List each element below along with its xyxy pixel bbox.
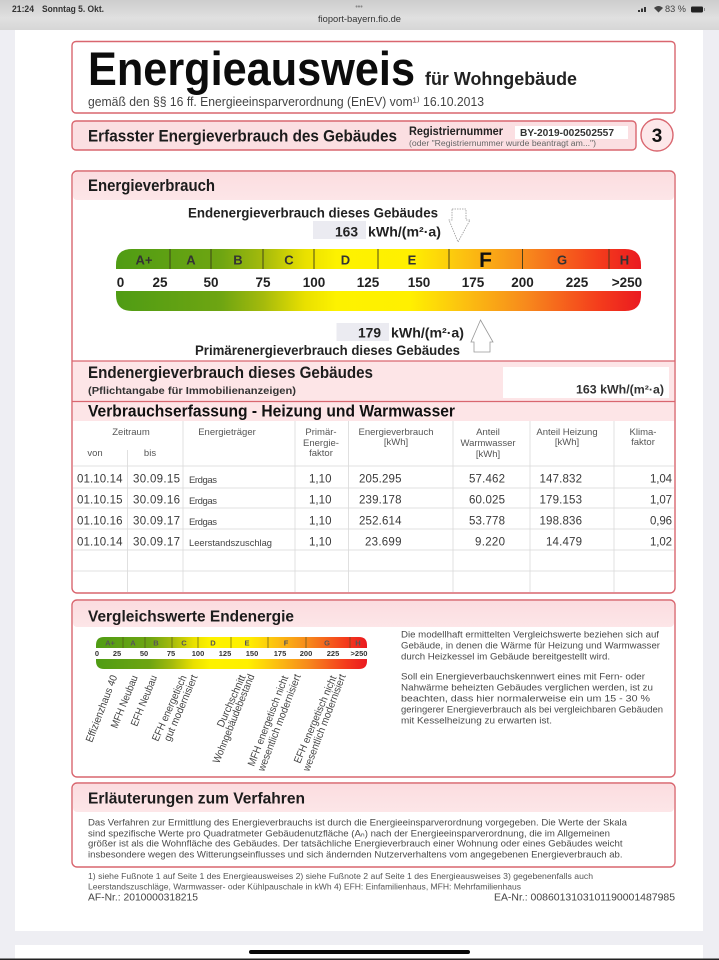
table header: faktor — [631, 437, 655, 448]
class labels: A — [186, 252, 196, 268]
table header: [kWh] — [384, 437, 408, 448]
explanatory text: Soll ein Energieverbauchskennwert eines mit Fern- oder — [401, 672, 646, 682]
explanatory text: geringerer Energieverbrauch als bei vergleichbaren Gebäuden — [401, 704, 663, 716]
status time and date: 21:24 — [12, 4, 34, 14]
header: Energieverbrauch: Energieverbrauch — [88, 177, 215, 195]
panel: comparison values — [72, 600, 675, 777]
table header: Warmwasser — [460, 438, 516, 449]
procedure text — [88, 818, 628, 860]
rotated building type labels — [84, 672, 349, 774]
mini class labels: C — [181, 638, 187, 648]
mini numbers: 25 — [113, 649, 121, 658]
registration note: (oder "Registriernummer wurde beantragt am...") — [409, 139, 596, 148]
table header: von — [87, 448, 103, 459]
header: Energieverbrauch — [73, 172, 674, 200]
table row 1 — [77, 474, 673, 486]
table header: [kWh] — [555, 437, 579, 448]
table row 2: 179.153 — [540, 494, 582, 506]
table header: Energie- — [303, 438, 339, 449]
arrow: final energy down — [449, 209, 470, 242]
mini scale — [95, 637, 367, 669]
section: mandatory final energy: Endenergieverbrauch dieses Gebäudes — [88, 364, 373, 382]
class labels: D — [341, 252, 350, 268]
explanatory text: Die modellhaft ermittelten Vergleichswerte beziehen sich auf — [401, 630, 659, 640]
page number badge: 3 — [652, 126, 662, 147]
table row 1: 205.295 — [359, 474, 402, 486]
table header: Energieverbrauch — [358, 427, 434, 438]
heading: Erfasster Energieverbrauch des Gebäudes — [88, 126, 397, 146]
table row 4 — [77, 536, 672, 549]
registration number — [515, 126, 628, 139]
class dividers — [170, 249, 609, 269]
arrow: primary energy up — [471, 320, 493, 352]
explanatory text: Gebäude, in denen die Wärme für Heizung und Warmwasser — [401, 640, 661, 652]
browser status bar — [0, 0, 719, 30]
value: final energy — [313, 221, 441, 240]
scale numbers: 125 — [357, 275, 380, 290]
rotated building type labels: MFH Neubau — [109, 674, 141, 730]
mini numbers: 225 — [327, 649, 339, 658]
class labels: C — [284, 252, 294, 268]
scale numbers: >250 — [612, 275, 642, 290]
procedure text: Das Verfahren zur Ermittlung des Energieverbrauchs ist durch die Energieeinsparverordnung vorgegeben. Die Werte der Skala — [88, 818, 628, 828]
browser tab dots: ••• — [355, 4, 363, 11]
primary energy gradient bar — [116, 291, 641, 311]
explanatory text: Nahwärme beheizten Gebäudes verglichen werden, ist zu — [401, 682, 653, 694]
table row 4: 14.479 — [546, 536, 582, 548]
table row 2: 01.10.15 — [77, 494, 122, 506]
table row 3: Erdgas — [189, 517, 217, 528]
table row 3: 1,10 — [309, 516, 332, 528]
scale numbers: 175 — [462, 275, 485, 290]
mini numbers: >250 — [351, 649, 367, 658]
footnotes: Leerstandszuschläge, Warmwasser- oder Kühlpauschale in kWh 4) EFH: Einfamilienhaus, MFH: Mehrfamilienhaus — [88, 882, 521, 892]
table row 2: 30.09.16 — [133, 494, 180, 506]
class labels: A+ — [136, 252, 153, 268]
mini numbers: 125 — [219, 649, 231, 658]
table row 2: 1,07 — [650, 494, 672, 506]
class labels: B — [233, 252, 243, 268]
table row 1: 30.09.15 — [133, 474, 180, 486]
section: mandatory final energy — [72, 361, 675, 401]
footnotes — [88, 871, 593, 892]
table row 2: 239.178 — [359, 494, 402, 506]
panel: procedure notes — [72, 783, 675, 867]
section: consumption table: Verbrauchserfassung - Heizung und Warmwasser — [88, 402, 455, 420]
bottom edge — [0, 958, 719, 960]
table header: Anteil — [476, 427, 500, 438]
table row 1: 147.832 — [540, 474, 582, 486]
footnotes: 1) siehe Fußnote 1 auf Seite 1 des Energieausweises 2) siehe Fußnote 2 auf Seite 1 des Energieausweises 3) gegebenenfalls auch — [88, 871, 593, 881]
mini numbers: 175 — [274, 649, 286, 658]
table row 4: 1,02 — [650, 536, 672, 548]
registration label: Registriernummer — [409, 126, 503, 138]
scale numbers: 150 — [408, 275, 430, 290]
table header: Anteil Heizung — [536, 427, 598, 438]
value: primary energy — [336, 323, 464, 341]
procedure text: sind spezifische Werte pro Quadratmeter Gebäudenutzfläche (Aₙ) nach der Energieeinsparverordnung, die im Allgemeinen — [88, 828, 610, 840]
rotated building type labels: EFH energetisch — [150, 673, 190, 743]
rotated building type labels: gut modernisiert — [162, 673, 201, 743]
status time and date: Sonntag 5. Okt. — [42, 4, 104, 14]
legal basis: gemäß den §§ 16 ff. Energieeinsparverordnung (EnEV) vom¹⁾ 16.10.2013 — [88, 94, 484, 109]
rotated building type labels: Durchschnitt — [215, 673, 249, 729]
table row 4: 23.699 — [365, 536, 402, 548]
table header: Primär- — [305, 427, 337, 438]
procedure text: größer ist als die Wohnfläche des Gebäudes. Der tatsächliche Energieverbrauch einer Wohnung oder eines Gebäudes weicht — [88, 838, 623, 850]
table header: Zeitraum — [112, 427, 150, 438]
table row 3: 0,96 — [650, 516, 672, 528]
label: primary energy: Primärenergieverbrauch dieses Gebäudes — [195, 343, 460, 358]
procedure text: insbesondere wegen des Witterungseinflusses und sich ändernden Nutzerverhaltens vom angegebenen Energieverbrauch ab. — [88, 850, 622, 860]
value: primary energy: 179 — [358, 324, 381, 340]
certificate numbers: EA-Nr.: 0086013103101190001487985 — [494, 892, 675, 904]
value: final energy: kWh/(m²·a) — [368, 224, 441, 240]
certificate numbers — [88, 892, 675, 904]
icon: signal, wifi and battery: 83 % — [665, 4, 686, 14]
value: primary energy: kWh/(m²·a) — [391, 324, 464, 340]
icon: signal, wifi and battery — [638, 4, 705, 14]
table row 1: 57.462 — [469, 474, 505, 486]
rotated building type labels: Wohngebäudebestand — [211, 672, 257, 765]
table row 3: 252.614 — [359, 516, 402, 528]
mini class labels: D — [210, 638, 216, 648]
scale bar with classes — [116, 249, 641, 272]
scale numbers: 200 — [511, 275, 534, 290]
table row 4: 9.220 — [475, 536, 505, 548]
table header: [kWh] — [476, 449, 500, 460]
mini numbers: 100 — [192, 649, 204, 658]
mini class labels: H — [355, 638, 361, 648]
mini class labels: E — [244, 638, 250, 648]
table row 3: 198.836 — [540, 516, 582, 528]
header: Erläuterungen — [73, 784, 674, 812]
next document sheet — [15, 945, 703, 960]
section: mandatory final energy: (Pflichtangabe für Immobilienanzeigen) — [88, 385, 296, 397]
class labels: H — [620, 252, 629, 268]
mini class labels: B — [153, 638, 159, 648]
registration number: BY-2019-002502557 — [520, 128, 614, 139]
table row 4: 30.09.17 — [133, 536, 180, 548]
table row 1: 01.10.14 — [77, 474, 123, 486]
scale numbers: 75 — [255, 275, 271, 290]
section: consumption table — [72, 402, 675, 592]
rotated building type labels: EFH Neubau — [129, 673, 160, 728]
table row 1: 1,10 — [309, 474, 332, 486]
scale numbers: 50 — [203, 275, 219, 290]
rotated building type labels: wesentlich modernisiert — [300, 673, 349, 774]
class labels: F — [479, 249, 492, 272]
home indicator — [249, 950, 470, 954]
scale numbers: 25 — [152, 275, 168, 290]
panel: energy consumption and table — [72, 171, 675, 593]
subtitle: für Wohngebäude — [425, 68, 577, 89]
table row 1: 1,04 — [650, 474, 673, 486]
table row 3: 30.09.17 — [133, 516, 180, 528]
explanatory text: mit Kesselheizung zu erwarten ist. — [401, 716, 552, 726]
mini numbers: 75 — [167, 649, 175, 658]
mini class labels: F — [284, 638, 289, 648]
scale numbers: 100 — [303, 275, 325, 290]
rotated building type labels: Effizienzhaus 40 — [84, 673, 120, 744]
header: Erläuterungen: Erläuterungen zum Verfahren — [88, 790, 305, 808]
explanatory text: beachten, dass hier normalerweise ein um 15 - 30 % — [401, 694, 651, 704]
class labels — [136, 249, 629, 272]
value: final energy: 163 — [335, 224, 358, 240]
explanatory text — [401, 630, 663, 726]
scale numbers: 0 — [117, 275, 124, 290]
table row 4: 1,10 — [309, 536, 332, 548]
table row 2: 60.025 — [469, 494, 505, 506]
mini class labels — [105, 638, 361, 648]
mini numbers: 50 — [140, 649, 148, 658]
table row 2: 1,10 — [309, 494, 332, 506]
table row 2: Erdgas — [189, 496, 217, 507]
panel: registration header — [72, 121, 636, 150]
table row 4: 01.10.14 — [77, 536, 123, 548]
table row 3: 01.10.16 — [77, 516, 122, 528]
scale numbers: 225 — [566, 275, 589, 290]
table row 4: Leerstandszuschlag — [189, 538, 272, 549]
table row 3: 53.778 — [469, 516, 505, 528]
mini class labels: G — [324, 638, 330, 648]
table row 2 — [77, 494, 672, 507]
class labels: E — [408, 252, 417, 268]
header: Vergleichswerte: Vergleichswerte Endenergie — [88, 608, 294, 626]
label: final energy: Endenergieverbrauch dieses Gebäudes — [188, 206, 438, 220]
table header: Energieträger — [198, 427, 256, 438]
mini class labels: A — [130, 638, 136, 648]
mini class labels: A+ — [105, 638, 116, 648]
explanatory text: durch Heizkessel im Gebäude bereitgestellt wird. — [401, 652, 610, 662]
title: Energieausweis — [88, 42, 415, 95]
header: Vergleichswerte — [73, 601, 674, 627]
status time and date — [12, 4, 104, 14]
table header: Klima- — [630, 427, 656, 438]
table row 1: Erdgas — [189, 475, 217, 486]
mini numbers: 150 — [246, 649, 258, 658]
table header: bis — [144, 448, 156, 459]
panel: title — [72, 42, 675, 113]
section: mandatory final energy: 163 kWh/(m²·a) — [576, 384, 664, 396]
table header: faktor — [309, 448, 333, 459]
mini numbers — [95, 649, 367, 658]
scale numbers — [117, 275, 642, 290]
certificate numbers: AF-Nr.: 2010000318215 — [88, 892, 198, 904]
rotated building type labels: wesentlich modernisiert — [255, 673, 304, 774]
class labels: G — [557, 252, 567, 268]
url: fioport-bayern.fio.de — [318, 14, 401, 25]
table header — [87, 427, 656, 460]
mini numbers: 0 — [95, 649, 99, 658]
page number badge — [641, 119, 673, 151]
mini numbers: 200 — [300, 649, 312, 658]
rotated building type labels: EFH energetisch nicht — [292, 674, 340, 765]
table row 3 — [77, 516, 672, 528]
rotated building type labels: MFH energetisch nicht — [246, 674, 291, 768]
